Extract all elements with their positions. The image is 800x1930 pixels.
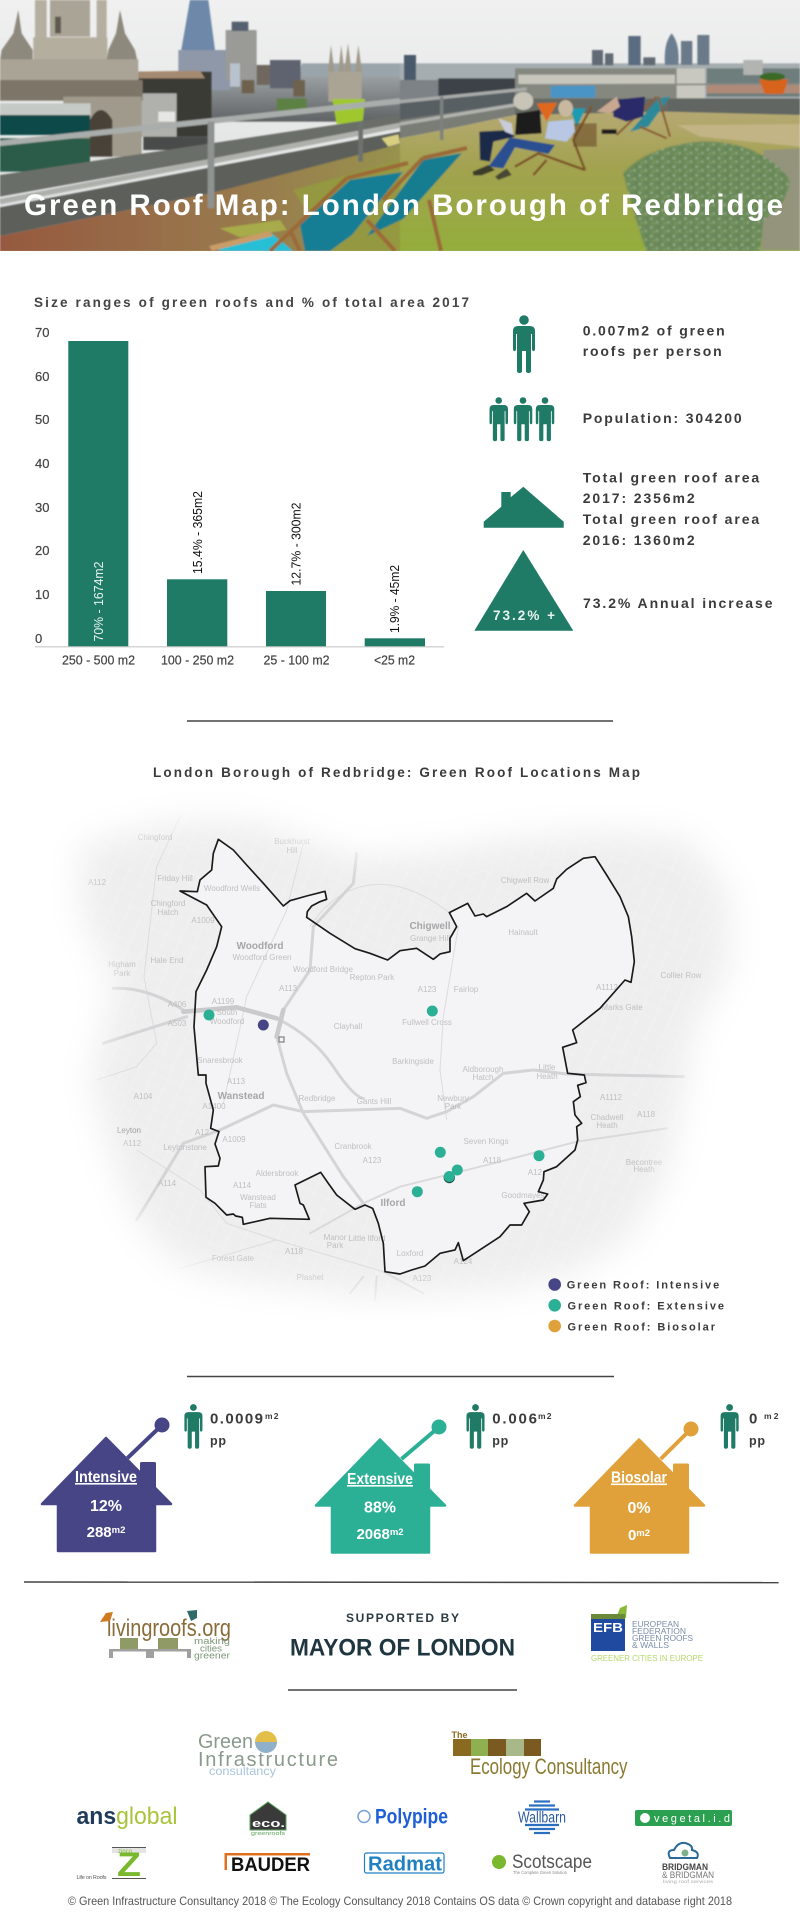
logo: Polypipe <box>358 1806 448 1828</box>
y axis labels: 50 <box>35 412 49 427</box>
map place labels: Woodford Bridge <box>293 965 353 974</box>
map place labels: Flats <box>249 1201 267 1210</box>
y axis labels: 70 <box>35 325 49 340</box>
map place labels: Gants Hill <box>357 1097 392 1106</box>
map place labels: Fairlop <box>454 985 479 994</box>
bar value labels: 1.9% - 45m2 <box>388 565 402 633</box>
stat: biosolar per person: m2 <box>764 1411 779 1421</box>
map place labels: Marks Gate <box>601 1003 643 1012</box>
map place labels: Plashet <box>297 1273 324 1282</box>
map place labels: Cranbrook <box>334 1142 373 1151</box>
stat: population <box>490 397 742 441</box>
logo: ansglobal: ansglobal <box>76 1803 178 1830</box>
stat text: 0.007m2 of green <box>583 322 725 338</box>
bar value labels: 70% - 1674m2 <box>92 561 106 642</box>
map place labels: Heath <box>633 1165 655 1174</box>
map place labels: A112 <box>123 1139 142 1148</box>
map place labels: A406 <box>168 1000 187 1009</box>
house: intensive: 12% <box>90 1498 122 1515</box>
map place labels: Woodford <box>236 941 284 952</box>
logo: livingroofs.org: greener <box>194 1650 230 1660</box>
stat: annual increase: 73.2% Annual increase <box>583 595 773 611</box>
logo: European Federation of Green Roofs and Walls: FEDERATION <box>632 1626 686 1636</box>
map place labels <box>88 833 702 1283</box>
map place labels: Park <box>114 969 131 978</box>
map place labels: Hainault <box>508 928 538 937</box>
map place labels: A1199 <box>212 997 235 1006</box>
stat: biosolar per person: pp <box>749 1434 765 1448</box>
map legend: Green Roof: Intensive <box>567 1280 719 1292</box>
stat: intensive per person <box>184 1404 279 1449</box>
y axis labels: 40 <box>35 456 49 471</box>
icon: three people <box>490 397 554 441</box>
map place labels: Little <box>539 1063 556 1072</box>
map place labels: Chingford <box>138 833 172 842</box>
header photo with title <box>0 0 800 252</box>
logo: eco green roofs <box>250 1802 286 1837</box>
logo: supported by Mayor of London: MAYOR OF LONDON <box>290 1634 515 1662</box>
map place labels: Newbury <box>437 1094 469 1103</box>
logo: vegetal i.d.: vegetal.i.d <box>654 1813 730 1825</box>
house: extensive: Extensive <box>347 1471 413 1488</box>
logo: livingroofs.org: cities <box>200 1644 223 1654</box>
map place labels: A118 <box>285 1247 304 1256</box>
logo: Radmat: Radmat <box>368 1854 442 1876</box>
map place labels: Aldersbrook <box>256 1169 299 1178</box>
x axis labels: 250 - 500 m2 <box>62 652 135 668</box>
x axis labels <box>62 652 415 668</box>
map place labels: Friday Hill <box>157 874 193 883</box>
logo: Green Infrastructure Consultancy: Green <box>198 1731 253 1753</box>
map place labels: Manor <box>324 1233 347 1242</box>
logo: European Federation of Green Roofs and Walls: EUROPEAN <box>632 1619 679 1629</box>
stat: total green roof area <box>484 470 759 548</box>
map place labels: Snaresbrook <box>197 1056 244 1065</box>
logo: European Federation of Green Roofs and Walls <box>591 1605 703 1663</box>
bar value labels: 12.7% - 300m2 <box>290 502 304 586</box>
map legend: Green Roof: Extensive <box>568 1300 724 1312</box>
map place labels: Loxford <box>397 1249 423 1258</box>
map place labels: Ilford <box>380 1198 406 1209</box>
bar value labels <box>92 491 402 642</box>
logo: Bridgman: & BRIDGMAN <box>662 1870 714 1880</box>
stat: extensive per person: 0.006 <box>492 1410 537 1428</box>
stat: total green roof area: 2017: 2356m2 <box>583 490 695 506</box>
house: biosolar: 0 <box>628 1527 636 1544</box>
y axis labels: 20 <box>35 543 49 558</box>
logo: zinco: zinco <box>118 1849 133 1855</box>
house: intensive <box>42 1418 171 1551</box>
map place labels: A1112 <box>600 1093 623 1102</box>
map place labels: A12 <box>195 1128 210 1137</box>
map place labels: Woodford <box>210 1017 244 1026</box>
logo: European Federation of Green Roofs and Walls: GREEN ROOFS <box>632 1633 693 1643</box>
house: extensive <box>316 1420 446 1552</box>
footer copyright: © Green Infrastructure Consultancy 2018 © The Ecology Consultancy 2018 Contains OS data © Crown copyright and database right 2018 <box>68 1894 732 1908</box>
x axis labels: 100 - 250 m2 <box>161 652 234 668</box>
logo: Wallbarn: Wallbarn <box>518 1810 566 1826</box>
stat: extensive per person: m2 <box>538 1411 552 1421</box>
house: extensive: m2 <box>390 1527 404 1538</box>
map place labels: Barkingside <box>392 1057 434 1066</box>
map place labels: A114 <box>158 1179 177 1188</box>
map place labels: Redbridge <box>299 1094 336 1103</box>
map place labels: A113 <box>279 984 298 993</box>
map place labels: A503 <box>168 1019 187 1028</box>
logo: livingroofs.org: livingroofs.org <box>107 1615 231 1642</box>
icon: roof <box>484 487 564 528</box>
map place labels: Collier Row <box>661 971 702 980</box>
map place labels: Buckhurst <box>274 837 311 846</box>
stat: annual increase: 73.2% + <box>493 608 555 623</box>
logo: supported by Mayor of London: SUPPORTED BY <box>346 1611 459 1625</box>
map place labels: A113 <box>227 1077 246 1086</box>
bars <box>68 341 425 647</box>
stat: biosolar per person <box>721 1404 779 1449</box>
map place labels: A114 <box>233 1181 252 1190</box>
logo: livingroofs.org <box>100 1610 231 1660</box>
map place labels: A1400 <box>202 1102 226 1111</box>
stat: intensive per person: 0.0009 <box>210 1410 263 1428</box>
map place labels: A123 <box>418 985 437 994</box>
logo: zinco <box>76 1846 146 1884</box>
logo: eco green roofs: eco. <box>252 1818 285 1830</box>
stat: total green roof area: Total green roof area <box>583 511 759 527</box>
y axis labels: 60 <box>35 369 49 384</box>
map place labels: A124 <box>454 1257 473 1266</box>
map legend: Green Roof: Biosolar <box>568 1322 716 1334</box>
map place labels: A12 <box>528 1168 543 1177</box>
map place labels: Higham <box>108 960 136 969</box>
stat: biosolar per person: 0 <box>749 1410 757 1428</box>
map place labels: Repton Park <box>350 973 395 982</box>
bar chart: size ranges <box>35 325 444 668</box>
map place labels: Heath <box>536 1072 558 1081</box>
map place labels: Wanstead <box>218 1091 264 1102</box>
logo: European Federation of Green Roofs and Walls: & WALLS <box>632 1640 669 1650</box>
stat: per person: roofs per person <box>583 343 722 359</box>
map place labels: A1112 <box>596 983 619 992</box>
photo scene <box>0 0 800 252</box>
map place labels: Leytonstone <box>163 1143 207 1152</box>
stat: extensive per person <box>466 1404 552 1449</box>
stat: per person <box>513 315 725 373</box>
x axis labels: 25 - 100 m2 <box>264 652 330 668</box>
bar value labels: 15.4% - 365m2 <box>191 491 205 574</box>
y axis labels <box>35 325 49 646</box>
map legend <box>548 1278 724 1334</box>
map place labels: Forest Gate <box>212 1254 255 1263</box>
map base with roads <box>81 816 730 1301</box>
map place labels: Woodford Green <box>232 953 292 962</box>
x axis labels: <25 m2 <box>374 652 415 668</box>
house: biosolar: m2 <box>636 1528 650 1539</box>
map place labels: A118 <box>483 1156 502 1165</box>
map place labels: A123 <box>363 1156 382 1165</box>
house: intensive: Intensive <box>75 1469 137 1486</box>
map place labels: Chigwell <box>409 921 451 932</box>
map place labels: Clayhall <box>334 1022 362 1031</box>
logo: Green Infrastructure Consultancy: Infrastructure <box>198 1749 338 1771</box>
photo: foreground deck chairs <box>209 148 467 251</box>
map place labels: Becontree <box>626 1158 663 1167</box>
icon: triangle <box>474 550 573 631</box>
logo: Bauder: BAUDER <box>231 1855 310 1876</box>
logo: Bridgman: BRIDGMAN <box>662 1862 708 1872</box>
logo: European Federation of Green Roofs and Walls: EFB <box>593 1620 623 1635</box>
map place labels: Chingford <box>151 899 185 908</box>
map place labels: Hill <box>286 846 298 855</box>
logo: Green Infrastructure Consultancy: consultancy <box>209 1764 276 1778</box>
map place labels: Grange Hill <box>410 934 450 943</box>
map place labels: Park <box>445 1102 462 1111</box>
logo: Wallbarn <box>518 1802 566 1833</box>
logo: Green Infrastructure Consultancy <box>198 1731 338 1778</box>
logo: The Ecology Consultancy: The <box>452 1730 468 1740</box>
logo: The Ecology Consultancy <box>452 1730 628 1779</box>
map place labels: Chigwell Row <box>501 876 549 885</box>
map place labels: Hale End <box>151 956 183 965</box>
map place labels: A118 <box>637 1110 656 1119</box>
logo: supported by Mayor of London <box>290 1611 515 1662</box>
stat: total green roof area: 2016: 1360m2 <box>583 532 695 548</box>
house: extensive: 88% <box>364 1500 396 1516</box>
house: intensive: m2 <box>112 1525 125 1536</box>
stat: population: Population: 304200 <box>583 410 742 426</box>
map place labels: Fullwell Cross <box>402 1018 452 1027</box>
house: biosolar <box>575 1422 704 1552</box>
map place labels: Little Ilford <box>349 1234 385 1243</box>
map place labels: Seven Kings <box>464 1137 508 1146</box>
map place labels: South <box>217 1008 237 1017</box>
map place labels: A112 <box>88 878 107 887</box>
logo: European Federation of Green Roofs and Walls: GREENER CITIES IN EUROPE <box>591 1653 703 1663</box>
logo: vegetal i.d. <box>635 1810 732 1826</box>
map place labels: A104 <box>134 1092 153 1101</box>
logo: livingroofs.org: making <box>194 1636 230 1646</box>
y axis labels: 30 <box>35 500 49 515</box>
stat: intensive per person: m2 <box>265 1411 279 1421</box>
photo: right side skyline, roof and people <box>400 33 800 252</box>
y axis labels: 0 <box>35 631 42 646</box>
map place labels: Hatch <box>473 1073 493 1082</box>
map heading: London Borough of Redbridge: Green Roof Locations Map <box>153 765 640 780</box>
house: extensive: 2068 <box>356 1526 390 1543</box>
stat: extensive per person: pp <box>492 1434 509 1448</box>
stat: total green roof area: Total green roof area <box>583 470 759 486</box>
house: intensive: 288 <box>87 1524 112 1541</box>
map place labels: Wanstead <box>240 1193 276 1202</box>
logo: The Ecology Consultancy: Ecology Consultancy <box>470 1754 628 1779</box>
map place labels: Woodford Wells <box>204 884 260 893</box>
map place labels: Park <box>327 1241 344 1250</box>
map place labels: Hatch <box>158 908 178 917</box>
stat: intensive per person: pp <box>210 1434 226 1448</box>
title: Green Roof Map: London Borough of Redbridge <box>24 189 783 222</box>
map place labels: Leyton <box>117 1126 141 1135</box>
map place labels: Goodmayes <box>501 1191 545 1200</box>
logo: Polypipe: Polypipe <box>375 1806 448 1828</box>
photo: left side buildings and railing <box>0 0 400 252</box>
borough boundary <box>180 839 634 1274</box>
stat: annual increase <box>474 550 773 631</box>
logo: Scotscape <box>492 1852 592 1875</box>
map place labels: Chadwell <box>591 1113 624 1122</box>
map place labels: Heath <box>596 1121 618 1130</box>
bar chart heading: Size ranges of green roofs and % of total area 2017 <box>34 295 469 310</box>
logo: zinco: Life on Roofs <box>76 1875 107 1881</box>
map place labels: A1009 <box>222 1135 246 1144</box>
roof location markers <box>204 1006 544 1197</box>
logo: eco green roofs: greenroofs <box>251 1831 285 1837</box>
logo: Bridgman: living roof services <box>663 1879 714 1884</box>
house: biosolar: 0% <box>627 1500 651 1517</box>
y axis labels: 10 <box>35 587 49 602</box>
logo: Bridgman <box>662 1843 714 1884</box>
logo: zinco: Z <box>117 1846 141 1884</box>
icon: person <box>513 326 535 373</box>
map place labels: A123 <box>413 1274 432 1283</box>
map: green roof locations <box>81 816 730 1301</box>
house: biosolar: Biosolar <box>611 1470 667 1486</box>
map place labels: Aldborough <box>463 1065 503 1074</box>
map place labels: A1009 <box>191 916 215 925</box>
logo: Scotscape: The Complete Green Solution <box>513 1870 567 1875</box>
logo: Scotscape: Scotscape <box>512 1852 592 1873</box>
station marker <box>279 1037 284 1042</box>
